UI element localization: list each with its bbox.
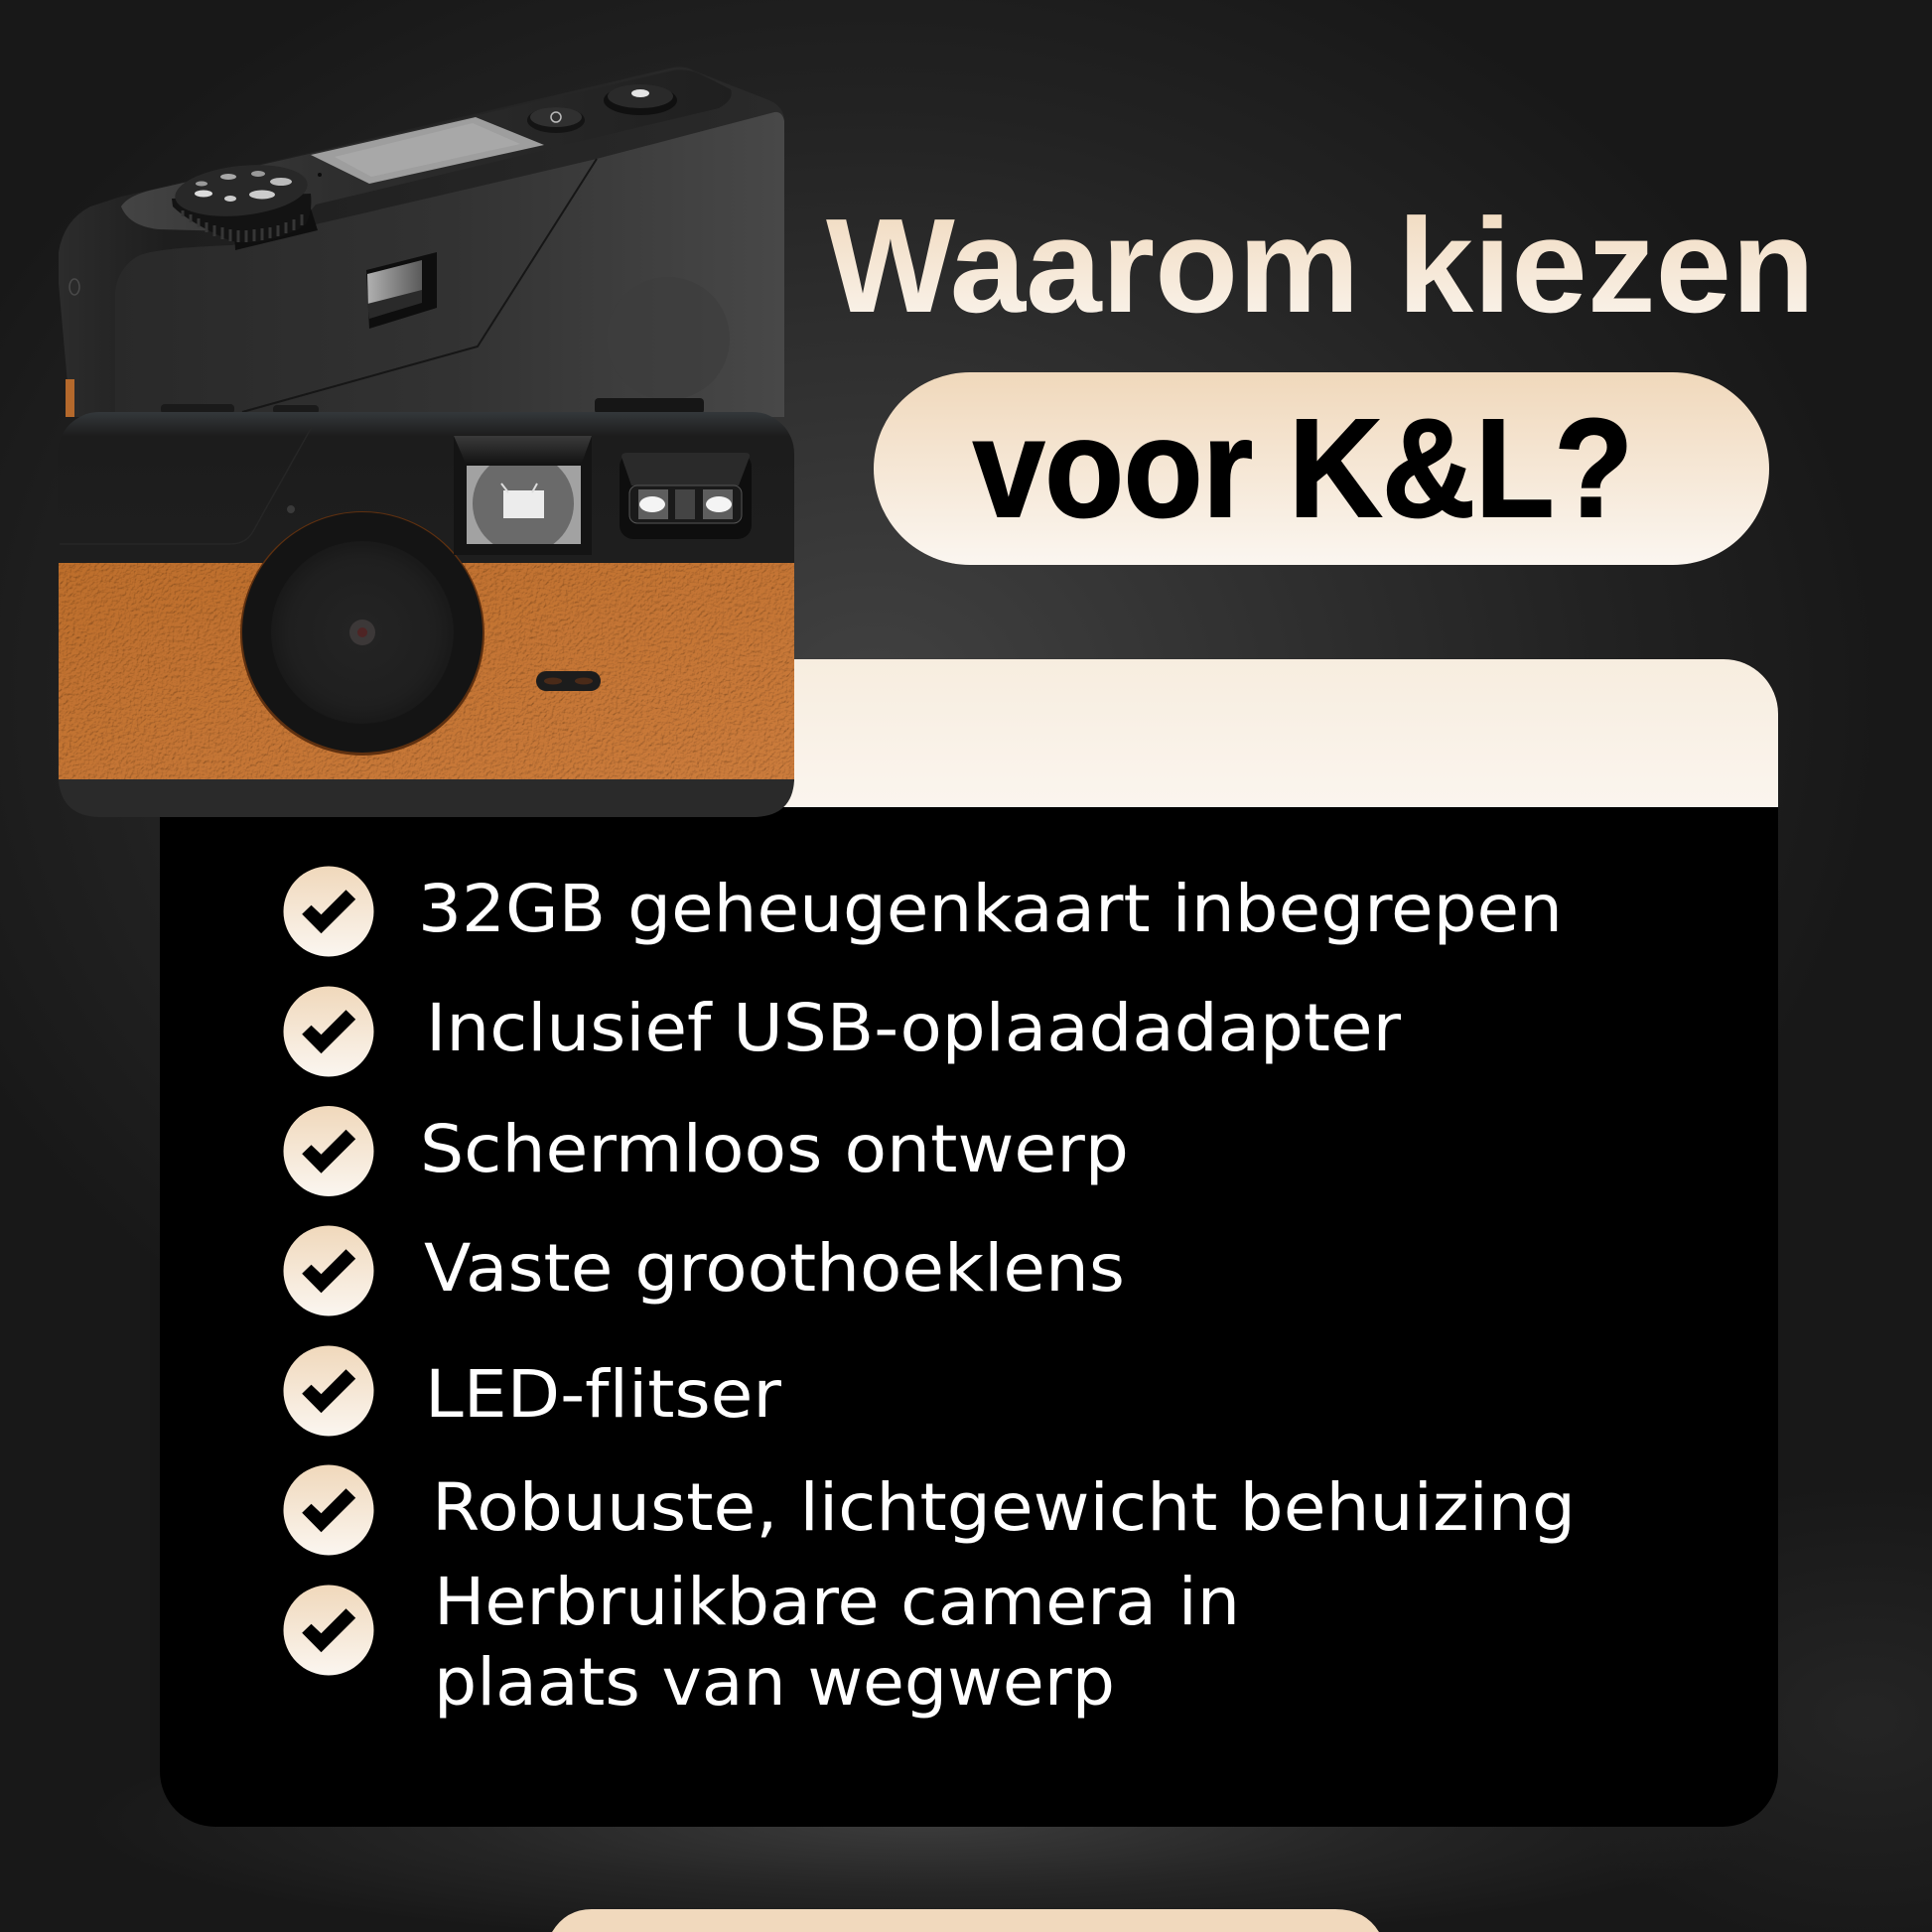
label: 32GB geheugenkaart inbegrepen — [418, 871, 1563, 947]
sensor dot — [287, 505, 295, 513]
heading pill: voor K&L? — [874, 372, 1769, 565]
label: LED-flitser — [425, 1356, 782, 1433]
side screw — [69, 279, 79, 295]
mic hole — [318, 173, 322, 177]
card cream header — [160, 659, 1778, 807]
bottom band — [59, 779, 794, 817]
icon: check badge — [284, 987, 373, 1076]
top plate — [121, 69, 732, 231]
icon: check badge — [284, 866, 373, 957]
item: LED-flitser — [284, 1346, 782, 1436]
viewfinder — [454, 436, 592, 555]
icon: check badge — [284, 1585, 373, 1676]
card black body — [160, 807, 1778, 1827]
lens — [240, 511, 484, 756]
bottom buttons — [161, 404, 234, 414]
icon: check badge — [284, 1465, 373, 1555]
front body — [58, 412, 794, 817]
rear front face — [115, 112, 784, 417]
flash — [620, 453, 752, 539]
item: USB-oplaadadapter — [284, 987, 1402, 1076]
panel: features card — [160, 659, 1778, 1827]
item: 32GB geheugenkaart — [284, 866, 1563, 957]
label: Inclusief USB-oplaadadapter — [426, 990, 1402, 1066]
item: Vaste groothoeklens — [284, 1225, 1125, 1316]
icon: check badge — [284, 1225, 373, 1316]
mode dial — [172, 159, 318, 250]
item: Schermloos ontwerp — [284, 1106, 1129, 1196]
label: Herbruikbare camera in — [434, 1564, 1240, 1640]
item: Robuuste behuizing — [284, 1465, 1576, 1555]
camera: rear view — [59, 67, 784, 417]
leather wrap — [59, 563, 794, 779]
pill text: voor K&L? — [973, 389, 1633, 546]
top knob — [595, 398, 704, 414]
pill background — [874, 372, 1769, 565]
rear viewfinder — [366, 252, 437, 329]
icon: check badge — [284, 1346, 373, 1436]
body crease line — [242, 159, 597, 412]
power button — [527, 107, 585, 133]
bottom pill (cropped) — [552, 1909, 1379, 1932]
bottom button — [273, 405, 319, 414]
shutter button — [604, 84, 677, 115]
label: Vaste groothoeklens — [424, 1230, 1125, 1307]
faint round mark — [607, 277, 730, 400]
label: Schermloos ontwerp — [420, 1111, 1129, 1187]
orange strip — [66, 379, 74, 417]
heading: Waarom kiezen: Waarom kiezen — [826, 191, 1815, 341]
item: Herbruikbare camera — [284, 1564, 1240, 1721]
icon: check badge — [284, 1106, 373, 1196]
speaker slot — [536, 671, 601, 691]
camera: front view — [58, 412, 794, 817]
label: plaats van wegwerp — [434, 1644, 1115, 1721]
top seam — [60, 427, 312, 544]
feature list — [284, 866, 1576, 1721]
rear body — [59, 67, 784, 417]
LCD window — [311, 117, 544, 184]
label: Robuuste, lichtgewicht behuizing — [432, 1469, 1576, 1546]
